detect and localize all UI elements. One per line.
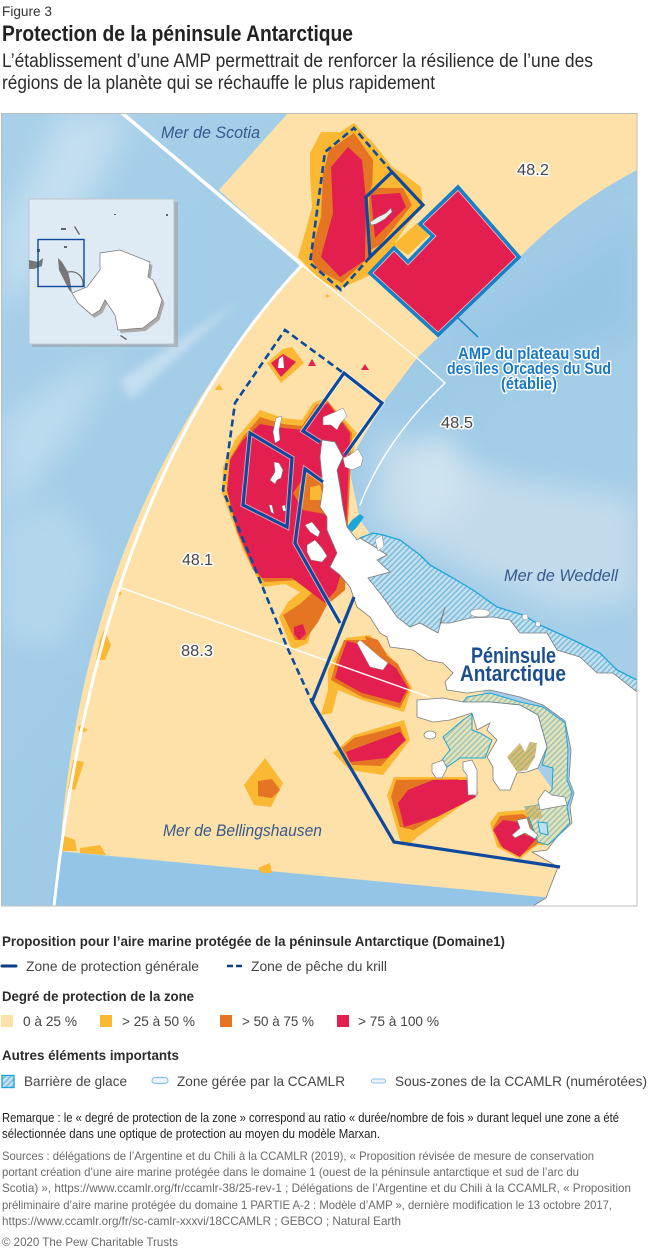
legend: 0-25: 0 à 25 % [23,1013,77,1029]
sources: https://www.ccamlr.org/fr/sc-camlr-xxxvi/18CCAMLR ; GEBCO ; Natural Earth [2,1214,401,1228]
note [2,1111,619,1141]
leader line to MPA label [458,318,478,337]
legend: degree heading: Degré de protection de la zone [2,988,194,1004]
protection patches: north krill zone [298,123,429,290]
subarea numbers: 48.1 [182,552,213,569]
MPA label: des îles Orcades du Sud [447,359,611,378]
Wilkins ice shelf [442,714,492,767]
inset Weddell arc [68,272,83,286]
sea label: Weddell: Mer de Weddell [504,566,619,585]
figure label: Figure 3 [2,3,52,19]
ocean background [2,114,637,906]
Weddell coast islands [269,408,540,626]
peninsula label [460,643,566,686]
legend: other heading: Autres éléments importants [2,1047,179,1063]
MPA label: (établie) [501,374,557,393]
legend: 0-25 [1,1013,77,1029]
copyright: © 2020 The Pew Charitable Trusts [2,1235,178,1249]
small southern islands [424,731,567,839]
legend: ice shelf: Barrière de glace [24,1073,127,1089]
CCAMLR management area (0 to 25 %) [60,113,637,898]
small inlet north of Larsen [347,514,364,532]
peninsula label: Péninsule [471,643,556,668]
Antarctica [72,250,162,330]
map [2,113,637,906]
sea label: Bellingshausen: Mer de Bellingshausen [163,821,322,840]
peninsula label: Antarctique [460,661,566,686]
general protection zone underlay [243,373,382,623]
small blue ice-shelf patch [538,822,548,835]
sources: portant création d’une aire marine protégée dans le domaine 1 (ouest de la péninsule antarctique et sud de l’arc du [2,1165,579,1179]
mainland [320,440,637,906]
brown part of southern shelf [525,805,543,820]
subtitle [2,51,593,94]
sources: Sources : délégations de l’Argentine et du Chili à la CCAMLR (2019), « Proposition révisée de mesure de conservation [2,1149,594,1163]
sea label: Scotia: Mer de Scotia [161,123,260,142]
krill fishing zone (dashed) [223,128,392,702]
MPA label [447,344,611,393]
protection patches: Bellingshausen coast [61,294,548,873]
tan inlet shelf [507,742,537,772]
subarea numbers: 88.3 [181,643,213,660]
South America tip [29,258,43,269]
sources [2,1149,631,1228]
legend: protection zone line: Zone de protection générale [26,958,199,974]
subarea numbers: 48.5 [441,415,473,432]
note: sélectionnée dans une optique de protection au moyen du modèle Marxan. [2,1127,380,1141]
legend: 75-100: > 75 à 100 % [358,1013,439,1029]
map frame [2,114,637,906]
legend: proposal heading: Proposition pour l’aire marine protégée de la péninsule Antarctique (Domaine1) [2,933,505,949]
general protection zone (solid) [243,172,560,867]
Adelaide island and orange coast [357,636,388,670]
legend: 25-50: > 25 à 50 % [122,1013,195,1029]
subarea numbers [181,162,549,660]
legend: 50-75: > 50 à 75 % [242,1013,314,1029]
legend: krill zone line: Zone de pêche du krill [251,958,387,974]
MPA label: AMP du plateau sud [458,344,600,363]
subtitle: L’établissement d’une AMP permettrait de renforcer la résilience de l’une des [2,51,593,72]
Alexander Island [417,698,547,790]
inset peninsula [58,258,72,293]
inset extent box [38,240,84,286]
title: Protection de la péninsule Antarctique [2,21,353,46]
inset locator map [29,199,178,347]
subarea numbers: 48.2 [517,162,549,179]
sources: Scotia) », https://www.ccamlr.org/fr/ccamlr-38/25-rev-1 ; Délégations de l’Argentine et du Chili à la CCAMLR, « Proposition [2,1181,631,1195]
subtitle: régions de la planète qui se réchauffe le plus rapidement [2,73,436,94]
legend: CCAMLR zone: Zone gérée par la CCAMLR [177,1073,345,1089]
Larsen ice shelf [360,533,637,695]
legend: CCAMLR subareas: Sous-zones de la CCAMLR (numérotées) [395,1073,647,1089]
inset small islands [37,214,168,340]
protection patches: north peninsula [215,347,369,650]
South Orkney islands [370,208,392,225]
George VI ice shelf [463,693,572,845]
sources: préliminaire d’aire marine protégée du domaine 1 PARTIE A-2 : Modèle d’AMP », dernière modification le 13 octobre 2017, [2,1198,612,1212]
established MPA: South Orkney southern shelf [370,187,519,335]
CCAMLR subarea lines [54,113,445,906]
